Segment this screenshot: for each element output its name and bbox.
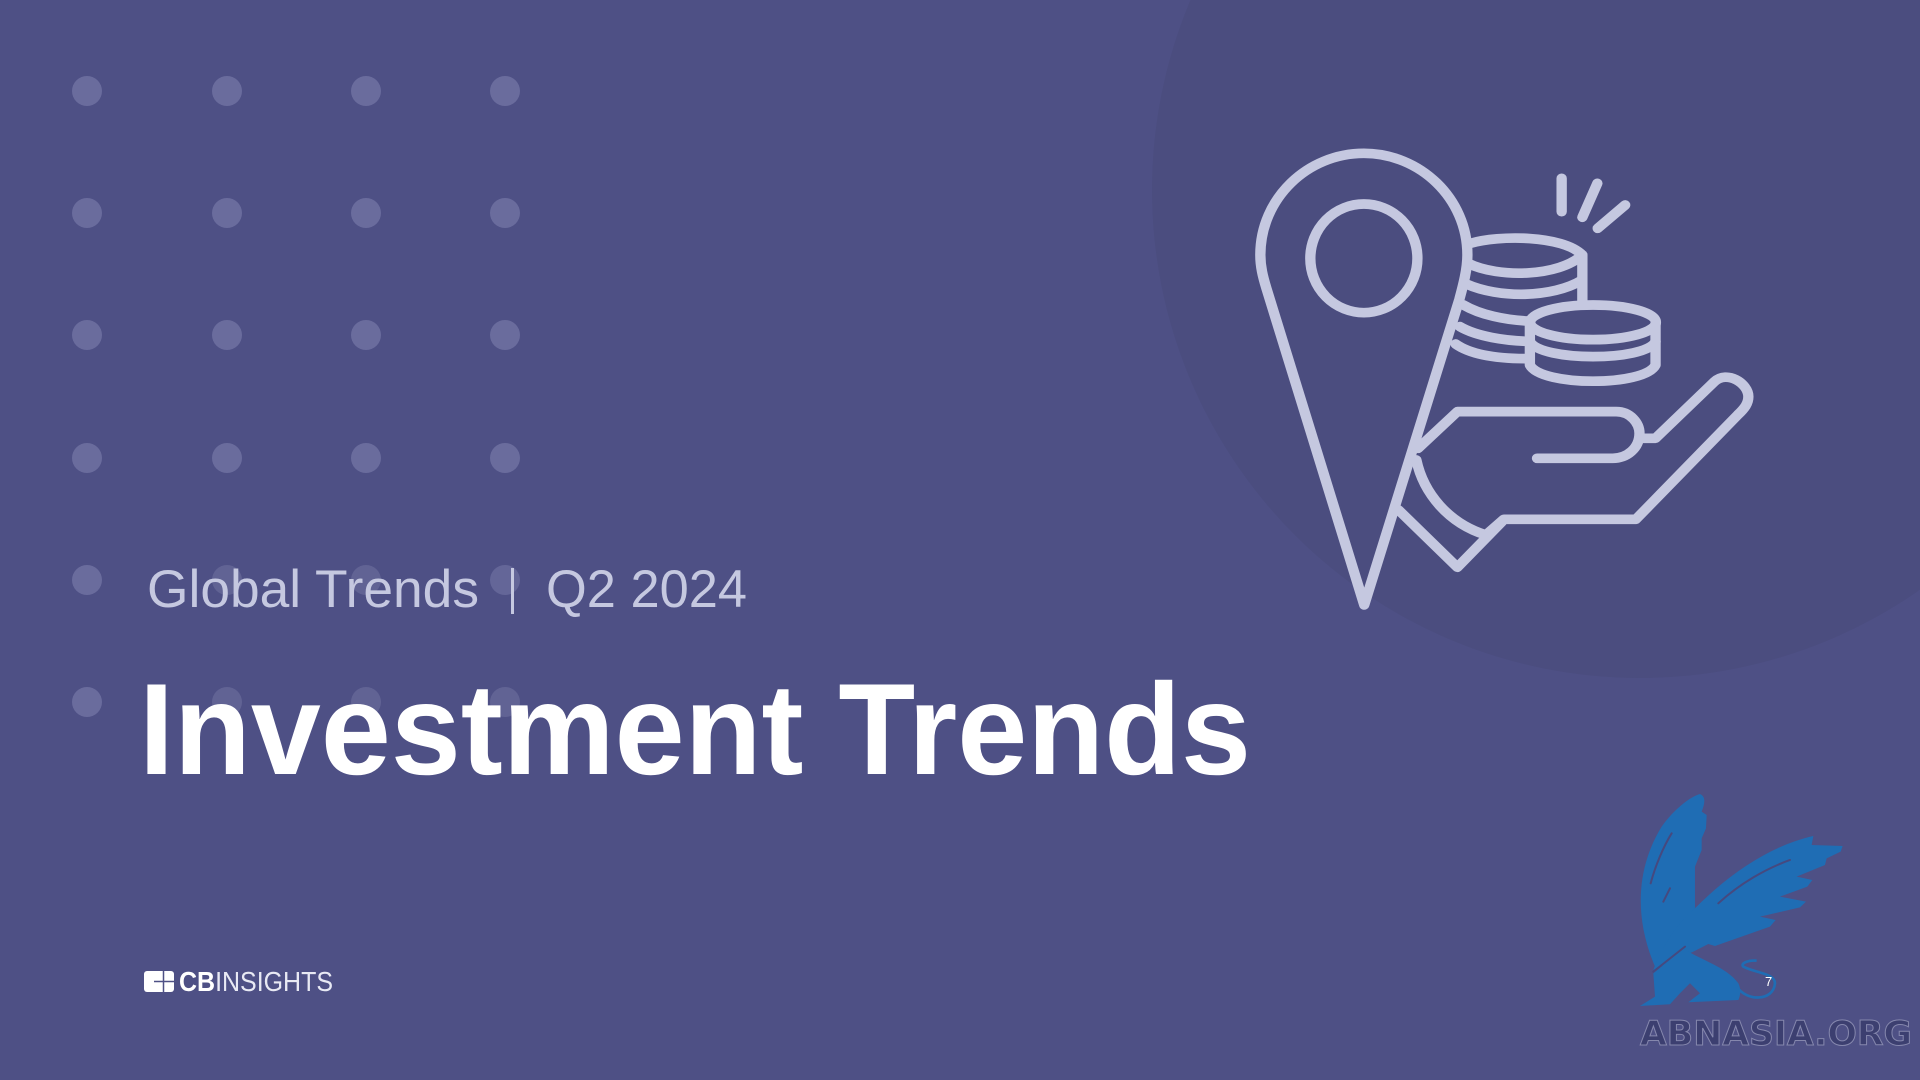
watermark griffin <box>1640 794 1843 1006</box>
subtitle <box>147 560 747 619</box>
griffin feather slits <box>1651 833 1790 972</box>
icon: sparkle lines <box>1562 178 1625 228</box>
icon: logo mark <box>144 971 174 992</box>
griffin tail <box>1737 961 1775 998</box>
background circle <box>1152 0 1920 678</box>
icon: front coin stack <box>1530 305 1656 381</box>
icon: open hand <box>1398 377 1748 567</box>
icon: map pin <box>1260 153 1467 605</box>
icon: location pin with coins and hand <box>1260 153 1748 605</box>
griffin body <box>1640 948 1740 1006</box>
griffin right wing <box>1653 836 1843 970</box>
subtitle: Q2 2024 <box>546 560 747 619</box>
griffin left wing <box>1641 794 1707 967</box>
CB Insights logo <box>144 966 333 997</box>
subtitle: Global Trends <box>147 560 479 619</box>
watermark text: ABNASIA.ORG <box>1640 1014 1912 1054</box>
icon: back coin stack <box>1456 238 1582 359</box>
dot grid <box>72 76 520 717</box>
page number: 7 <box>1765 974 1772 989</box>
title: Investment Trends <box>139 656 1251 802</box>
logo wordmark: CBINSIGHTS <box>179 966 333 997</box>
